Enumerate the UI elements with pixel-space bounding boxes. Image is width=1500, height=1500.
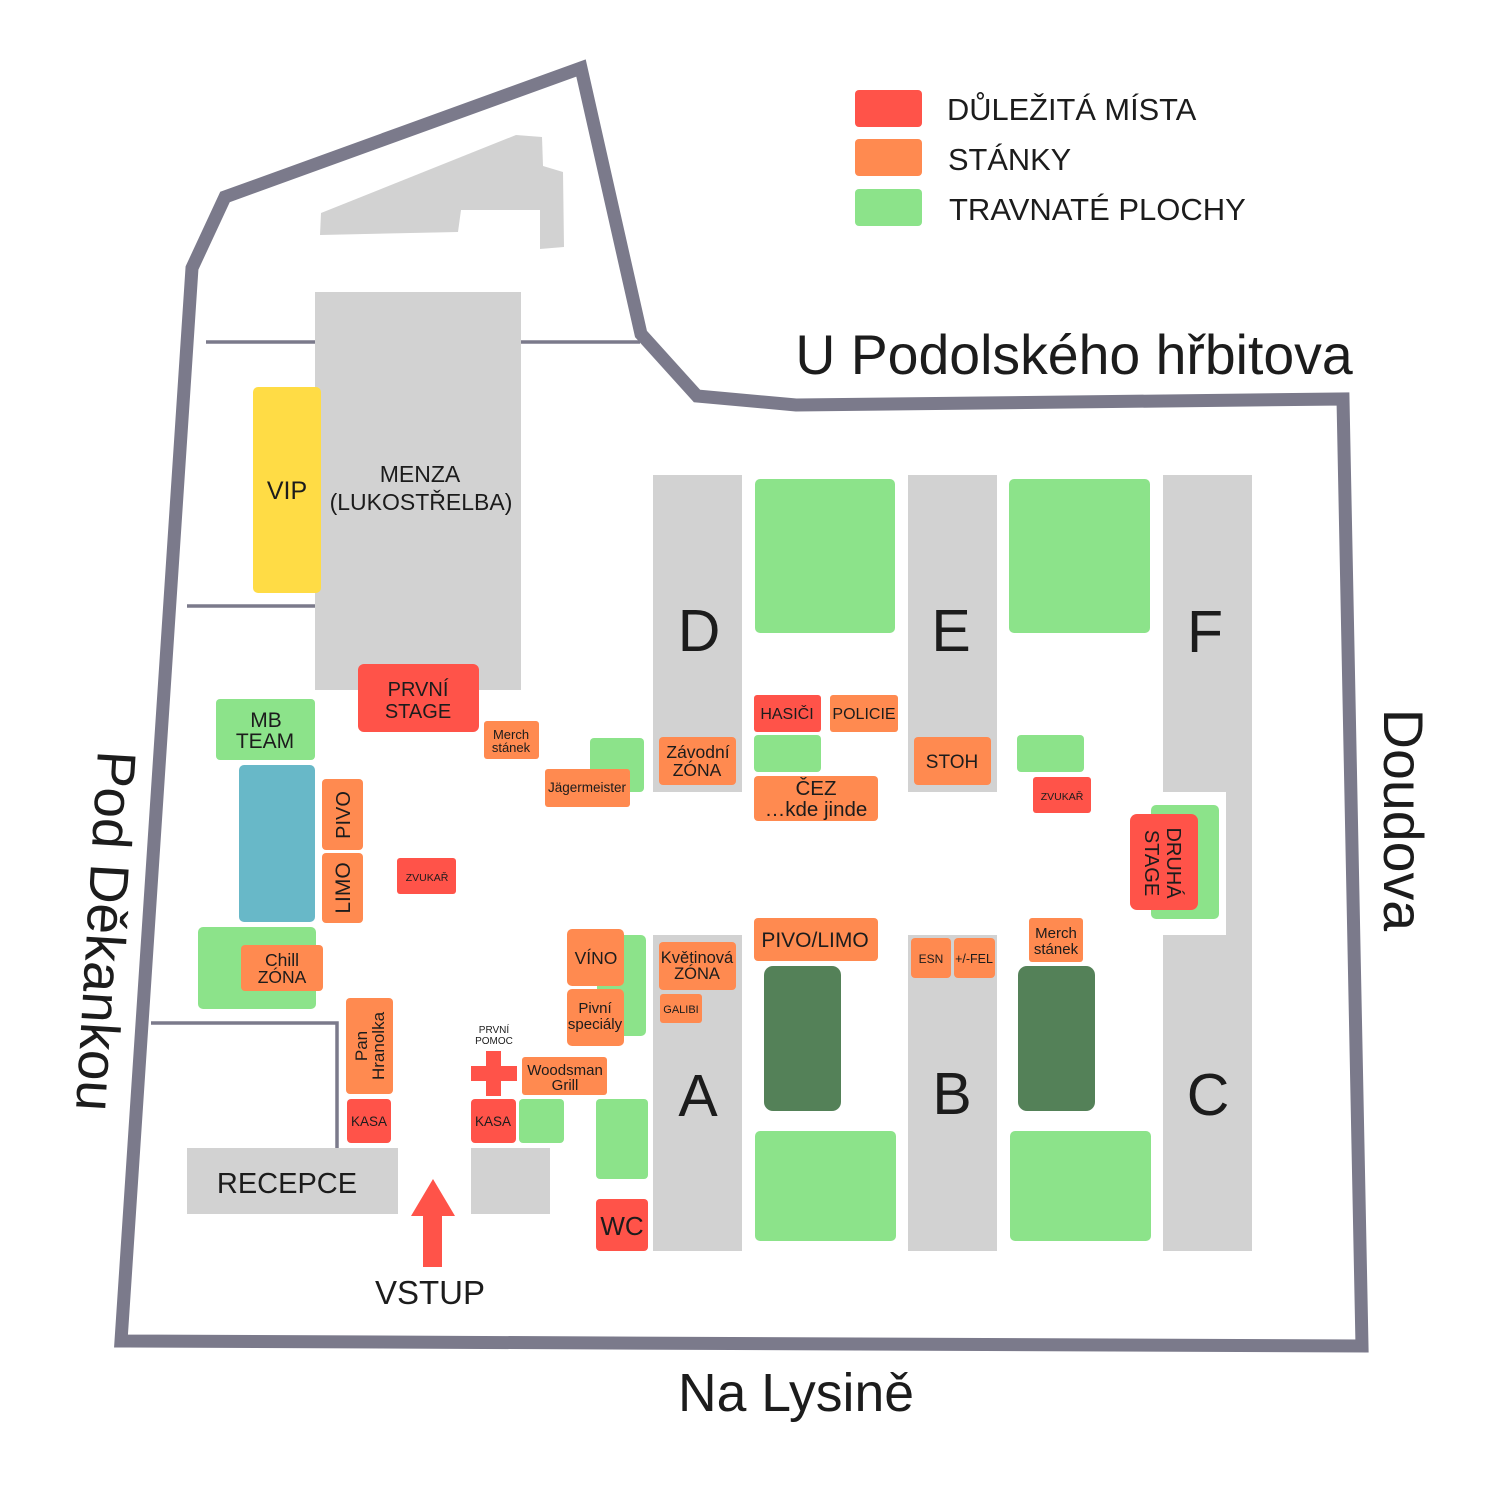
stall: stoh: [914, 737, 991, 785]
street label: U Podolskeho hrbitova: U Podolského hřbitova: [795, 324, 1353, 386]
stall: zavodni zona: Závodní: [666, 742, 730, 762]
hasici: HASIČI: [760, 704, 814, 723]
legend item: stalls: STÁNKY: [948, 142, 1071, 177]
legend: [855, 90, 1246, 227]
block D: D: [678, 598, 720, 664]
block D: [653, 475, 742, 792]
stall: zavodni zona: ZÓNA: [673, 759, 722, 780]
top grey building: [320, 135, 564, 249]
policie: [830, 695, 898, 732]
arrow: entrance: [411, 1179, 455, 1267]
kasa centre: [471, 1099, 516, 1143]
pan hranolka: [346, 998, 393, 1094]
first aid label: [475, 1023, 513, 1047]
stall: jagermeister: Jägermeister: [548, 780, 627, 795]
chill zone: Chill: [265, 950, 299, 970]
kvetinova zona: Květinová: [661, 949, 734, 967]
block F: [1163, 475, 1252, 1251]
legend item: important places: DŮLEŽITÁ MÍSTA: [947, 91, 1197, 127]
first aid label: POMOC: [475, 1036, 513, 1047]
entrance label: VSTUP: [375, 1274, 485, 1311]
stall: merch 1: stánek: [492, 740, 531, 755]
pivo: [322, 779, 363, 850]
stall: zavodni zona: [659, 737, 736, 785]
zvukar right: ZVUKAŘ: [1041, 790, 1084, 803]
building: menza: (LUKOSTŘELBA): [330, 489, 512, 515]
merch 2: stánek: [1034, 941, 1079, 958]
chill zone: ZÓNA: [258, 966, 307, 987]
recepce: [187, 1148, 398, 1214]
woodsman grill: Grill: [552, 1077, 578, 1094]
second stage: STAGE: [1140, 830, 1162, 896]
legend item: important places: [855, 90, 1197, 127]
second stage: [1130, 814, 1198, 910]
pivo limo: [754, 918, 878, 961]
stall: jagermeister: [545, 769, 630, 807]
pivni specialy: Pivní: [578, 1000, 612, 1017]
grass areas: [198, 479, 1219, 1241]
legend item: grass: TRAVNATÉ PLOCHY: [949, 192, 1246, 227]
zvukar left: ZVUKAŘ: [406, 871, 449, 884]
woodsman grill: Woodsman: [527, 1062, 603, 1079]
block E: E: [931, 598, 971, 664]
wc: [596, 1199, 648, 1251]
stall: stoh: STOH: [926, 752, 978, 773]
esn: ESN: [919, 952, 943, 966]
kasa left: [347, 1099, 391, 1143]
street label: Doudova: Doudova: [1372, 709, 1434, 931]
recepce: RECEPCE: [217, 1168, 357, 1200]
galibi: [660, 994, 702, 1023]
pivo limo: PIVO/LIMO: [761, 929, 869, 952]
policie: POLICIE: [832, 706, 896, 723]
limo: LIMO: [332, 862, 355, 914]
pivo: PIVO: [333, 791, 355, 839]
zvukar right: [1033, 777, 1091, 813]
water area: [239, 765, 315, 922]
woodsman grill: [522, 1057, 607, 1095]
block C label: C: [1187, 1062, 1229, 1128]
MB team: TEAM: [236, 730, 294, 753]
galibi: GALIBI: [663, 1004, 699, 1016]
icon: first aid cross: [471, 1051, 517, 1096]
kvetinova zona: [659, 942, 736, 990]
dark green areas: [764, 966, 1095, 1111]
block A: [653, 935, 742, 1251]
kasa centre: KASA: [475, 1114, 511, 1129]
grey building entrance: [471, 1148, 550, 1214]
area boundary: [121, 68, 1362, 1346]
block B: B: [932, 1061, 972, 1127]
vino: [567, 929, 624, 986]
pivni specialy: [567, 989, 624, 1046]
stall: merch 1: Merch: [493, 727, 529, 742]
first stage: PRVNÍ: [388, 678, 449, 701]
esn: [911, 938, 951, 978]
plus minus fel: [954, 938, 995, 978]
kasa left: KASA: [351, 1114, 387, 1129]
MB team: MB: [250, 709, 282, 732]
legend item: stalls: [855, 139, 1071, 177]
first stage: STAGE: [385, 701, 451, 723]
block E: [908, 475, 997, 792]
second stage: DRUHÁ: [1162, 827, 1185, 899]
VIP zone: VIP: [267, 477, 307, 505]
building: menza: [315, 292, 521, 690]
block A: A: [678, 1063, 718, 1129]
limo: [322, 853, 363, 923]
internal fences: [151, 342, 640, 1150]
legend item: grass: [855, 189, 1246, 227]
stall: cez: …kde jinde: [765, 798, 867, 821]
zvukar left: [397, 858, 456, 894]
stall: cez: ČEZ: [796, 777, 836, 800]
plus minus fel: +/-FEL: [955, 952, 993, 966]
block B: [908, 935, 997, 1251]
kvetinova zona: ZÓNA: [674, 964, 720, 983]
pan hranolka: Hranolka: [369, 1011, 388, 1080]
first aid label: PRVNÍ: [479, 1023, 509, 1036]
hasici: [754, 695, 821, 732]
wc: WC: [600, 1211, 644, 1241]
street label: Na Lysine: Na Lysině: [678, 1364, 914, 1423]
block F: F: [1187, 599, 1223, 665]
MB team: [216, 699, 315, 760]
VIP zone: [253, 387, 321, 593]
merch 2: Merch: [1035, 925, 1077, 942]
street label: Pod Dekankou: Pod Děkankou: [64, 749, 148, 1113]
vino: VÍNO: [575, 948, 617, 968]
stall: cez: [754, 776, 878, 821]
merch 2: [1029, 918, 1083, 962]
pan hranolka: Pan: [352, 1031, 371, 1061]
chill zone: [241, 945, 323, 991]
first stage: [358, 664, 479, 732]
building: menza: MENZA: [380, 461, 461, 487]
pivni specialy: speciály: [568, 1016, 623, 1033]
stall: merch 1: [484, 721, 539, 759]
